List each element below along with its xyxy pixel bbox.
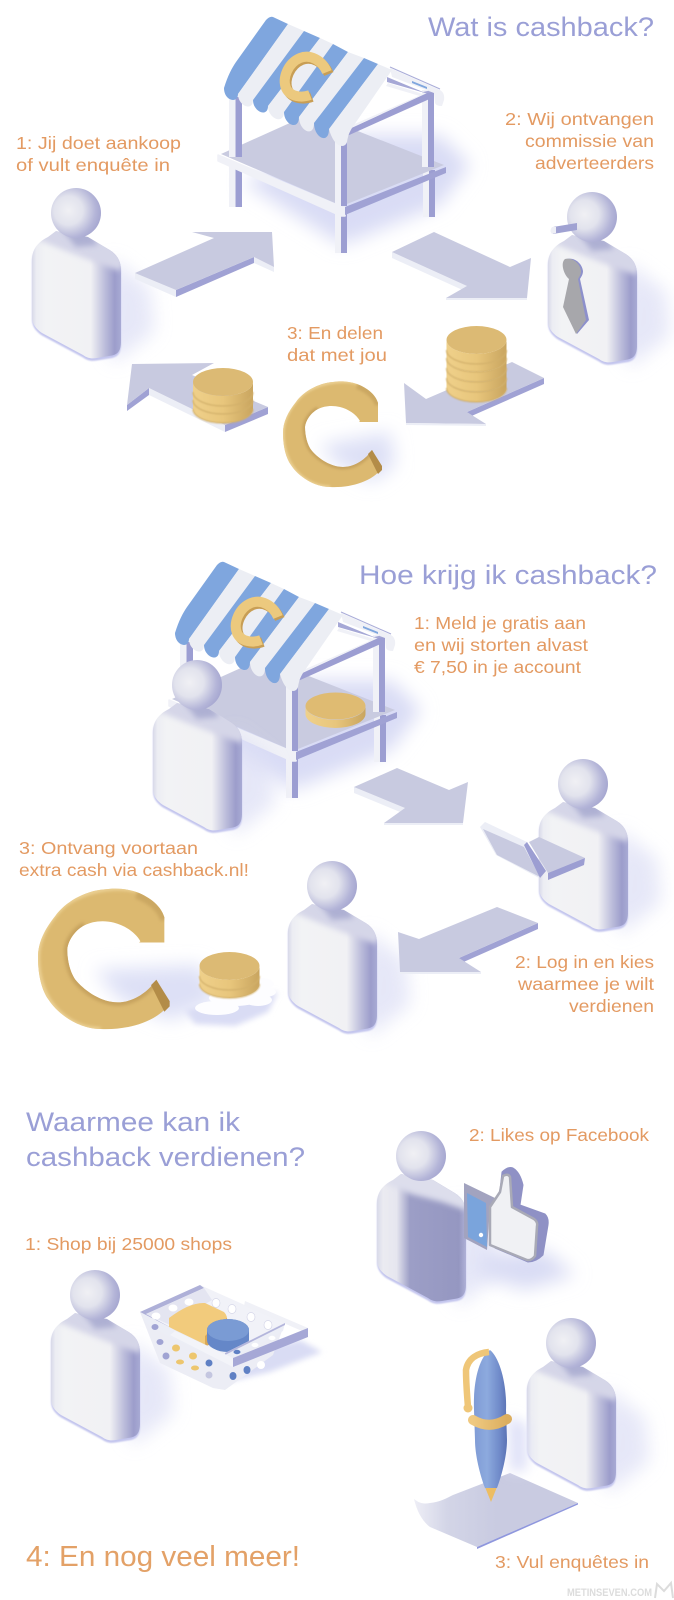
section: Hoe krijg ik cashback: [19, 560, 661, 1036]
icon: pen: [464, 1350, 527, 1502]
text: and more: 4: En nog veel meer!: [26, 1541, 300, 1573]
icon: hand holding coins: [185, 952, 278, 1026]
title: Waarmee kan ik cashback verdienen: cashback verdienen?: [26, 1142, 305, 1172]
icon: thumbs up: [464, 1168, 575, 1290]
arrow: laptop person to receiver: [398, 907, 538, 974]
icon: paper sheet: [414, 1473, 578, 1549]
text: step 1: 1: Jij doet aankoop: [16, 133, 181, 153]
arrow: stall to advertiser: [392, 232, 531, 300]
text: step 3: [19, 838, 249, 880]
text: step 1: [414, 613, 588, 677]
text: step 2: commissie van: [525, 131, 654, 151]
section: Wat is cashback: [16, 12, 670, 487]
text: step 3: extra cash via cashback.nl!: [19, 860, 249, 880]
icon: person with like: [373, 1131, 499, 1306]
text: step 3: [287, 323, 387, 365]
icon: market stall: [169, 562, 421, 798]
title: Waarmee kan ik cashback verdienen: [26, 1107, 305, 1172]
text: step 2: adverteerders: [535, 153, 654, 173]
text: step 3: 3: En delen: [287, 323, 383, 343]
arrow: customer to stall: [135, 232, 274, 297]
text: step 1: en wij storten alvast: [414, 635, 588, 655]
text: step 3: 3: Ontvang voortaan: [19, 838, 198, 858]
icon: person at stall: [149, 660, 275, 835]
title: Hoe krijg ik cashback: Hoe krijg ik cashback?: [359, 560, 657, 590]
text: surveys: 3: Vul enquêtes in: [495, 1552, 649, 1572]
text: step 1: [16, 133, 181, 175]
text: likes: 2: Likes op Facebook: [469, 1125, 649, 1145]
text: step 3: dat met jou: [287, 345, 387, 365]
text: step 1: € 7,50 in je account: [414, 657, 581, 677]
title: Waarmee kan ik cashback verdienen: Waarmee kan ik: [26, 1107, 241, 1137]
icon: big cashback C: [38, 889, 220, 1029]
text: step 2: waarmee je wilt: [517, 974, 654, 994]
text: step 1: 1: Meld je gratis aan: [414, 613, 586, 633]
text: step 1: of vult enquête in: [16, 155, 170, 175]
arrow: C back to customer: [127, 363, 268, 432]
icon: market stall: [218, 17, 470, 253]
icon: coin stack small: [193, 368, 253, 423]
icon: laptop: [480, 822, 585, 880]
icon: person advertiser with tie: [544, 192, 670, 367]
icon: coin stack large: [446, 326, 506, 402]
text: step 2: verdienen: [569, 996, 654, 1016]
section: Waarmee kan ik cashback verdienen: [25, 1107, 673, 1599]
text: step 2: [515, 952, 654, 1016]
icon: person customer: [28, 188, 154, 363]
text: step 2: 2: Log in en kies: [515, 952, 654, 972]
icon: shopping basket: [140, 1285, 322, 1390]
arrow: stall to laptop person: [354, 768, 468, 825]
text: shop: 1: Shop bij 25000 shops: [25, 1234, 232, 1254]
watermark: METINSEVEN.COM: [567, 1587, 652, 1599]
arrow: advertiser coins to cashback C: [404, 362, 544, 426]
icon: person with basket: [47, 1270, 173, 1445]
text: step 2: [505, 109, 654, 173]
title: Wat is cashback: Wat is cashback?: [428, 12, 654, 42]
text: step 2: 2: Wij ontvangen: [505, 109, 654, 129]
icon: person with laptop: [535, 759, 661, 934]
icon: person with pen: [523, 1318, 649, 1493]
icon: big cashback C: [283, 381, 395, 487]
icon: coin on table: [306, 692, 366, 728]
icon: person receiving: [284, 861, 410, 1036]
